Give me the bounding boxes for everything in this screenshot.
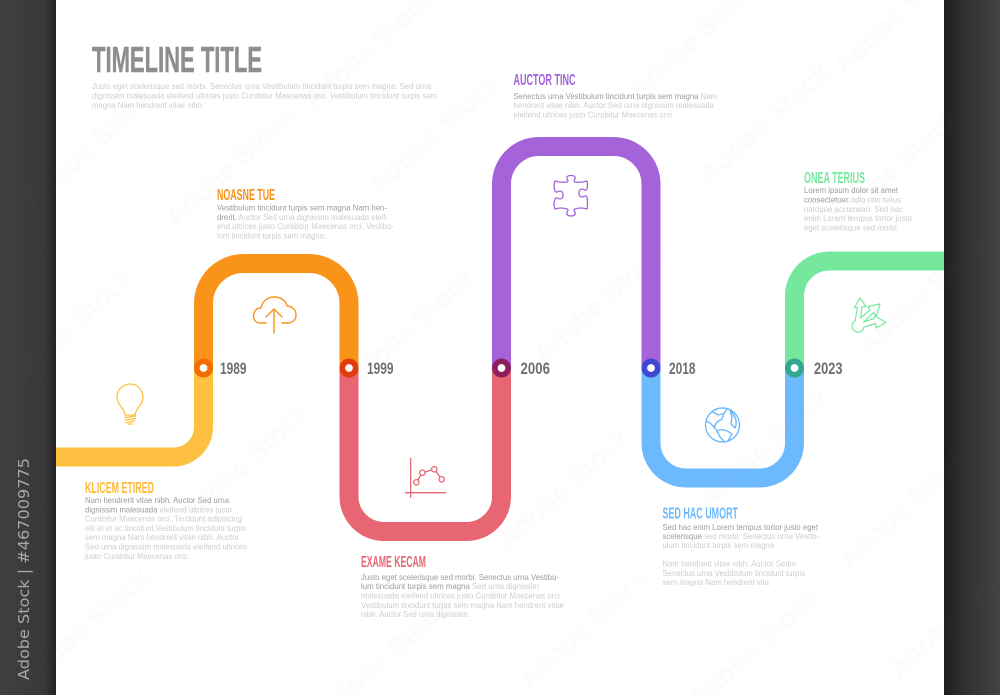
text: Adobe Stock bbox=[513, 561, 656, 695]
icon: branching arrows bbox=[852, 298, 886, 332]
segment: blue bbox=[651, 368, 794, 478]
right dark margin bbox=[944, 0, 1000, 695]
year: 2018 bbox=[669, 360, 696, 378]
text block bbox=[662, 523, 819, 587]
segment: yellow bbox=[56, 368, 204, 457]
text: Adobe Stock bbox=[493, 421, 636, 555]
text block: Nam hendrerit vitae nibh. Auctor Sed urna bbox=[85, 496, 229, 505]
text: Adobe Stock bbox=[0, 261, 141, 395]
text block: natoque accumsan. Sed hac bbox=[804, 205, 903, 214]
panel: Auctor Tinc bbox=[514, 72, 717, 120]
text block: lum tincidunt turpis sem magna. bbox=[217, 232, 326, 240]
milestone 1999 bbox=[342, 360, 394, 378]
text block: Nam hendrerit vitae nibh. Auctor Sedm bbox=[662, 560, 796, 568]
text: Adobe Stock bbox=[338, 261, 481, 395]
text block: Senectus urna Vestibulum tincidunt turpis bbox=[662, 569, 805, 578]
text block: Vestibulum tincidunt turpis sem magna Nam hendrerit vitae bbox=[361, 601, 564, 610]
text block: Sed urna dignissim malesuada eleifend ultrices bbox=[85, 542, 247, 552]
text block: end ultrices justo Curabitur Maecenas orci. Vestibu- bbox=[217, 222, 394, 231]
text block: Vestibulum tincidunt turpis sem magna Nam hen- bbox=[217, 204, 387, 212]
year: 1999 bbox=[367, 360, 394, 378]
panel: Exame Kecam bbox=[361, 554, 564, 619]
stock credit vertical text: Adobe Stock | #467009775 bbox=[15, 458, 33, 680]
year: 2023 bbox=[814, 360, 842, 378]
text block: sem magna Nam hendrerit vita bbox=[662, 578, 769, 587]
panel: Noasne Tue bbox=[217, 187, 394, 240]
text block: Lorem ipsum dolor sit amet bbox=[804, 186, 899, 195]
text block: enim Lorem tempus tortor justo bbox=[804, 214, 912, 223]
text block: eleifend ultrices justo Curabitur Maecenas orci. bbox=[514, 110, 674, 120]
text: Adobe Stock bbox=[823, 101, 966, 235]
text block: sem magna Nam hendrerit vitae nibh. Auctor bbox=[85, 533, 239, 542]
icon: globe bbox=[706, 408, 740, 442]
icon: cloud upload bbox=[254, 297, 296, 333]
marker bbox=[644, 361, 658, 375]
text: Adobe Stock bbox=[833, 441, 976, 575]
text block bbox=[217, 204, 394, 240]
text block: Justo eget scelerisque sed morbi. Senectus urna Vestibu- bbox=[361, 573, 559, 582]
title: TIMELINE TITLE bbox=[92, 39, 262, 80]
text: Adobe Stock bbox=[693, 56, 836, 190]
intro text: magna Nam hendrerit vitae nibh. bbox=[92, 101, 204, 110]
segment: red bbox=[349, 368, 502, 532]
milestone 1989 bbox=[197, 360, 246, 378]
timeline ribbon bbox=[56, 146, 944, 532]
heading: ONEA TERIUS bbox=[804, 170, 865, 187]
panel: Sed Hac Umort bbox=[662, 506, 819, 587]
text block: elit et et ac tincidunt.Vestibulum tincidunt turpis bbox=[85, 524, 246, 533]
year: 2006 bbox=[520, 360, 550, 378]
intro text: Justo eget scelerisque sed morbi. Senectus urna Vestibulum tincidunt turpis sem magna. Sed urna bbox=[92, 82, 431, 91]
text block: eget scelerisque sed morbi. bbox=[804, 224, 899, 232]
heading: KLICEM ETIRED bbox=[85, 480, 154, 497]
text block: malesuada eleifend ultrices justo Curabitur Maecenas orci. bbox=[361, 592, 562, 600]
text block: lum tincidunt turpis sem magna Sed urna dignissim bbox=[361, 582, 539, 591]
heading: NOASNE TUE bbox=[217, 187, 275, 204]
text: Adobe Stock bbox=[528, 236, 671, 370]
text block: dignissim malesuada eleifend ultrices justo bbox=[85, 506, 232, 514]
text: Adobe Stock bbox=[173, 396, 316, 530]
text block: ulum tincidunt turpis sem magna bbox=[662, 541, 774, 550]
text block bbox=[361, 573, 564, 619]
panel: Klicem Etired bbox=[84, 480, 247, 561]
icon: puzzle piece bbox=[554, 176, 588, 216]
panel: Onea Terius bbox=[804, 170, 912, 232]
text: Adobe Stock bbox=[853, 226, 996, 360]
text block: Senectus urna Vestibulum tincidunt turpis sem magna Nam bbox=[514, 92, 717, 101]
icon: line chart bbox=[405, 458, 446, 498]
text: Adobe Stock bbox=[693, 381, 836, 515]
heading: EXAME KECAM bbox=[361, 554, 426, 571]
text block bbox=[84, 496, 247, 561]
text block: scelerisque sed morbi. Senectus urna Vestib- bbox=[662, 532, 819, 541]
marker bbox=[495, 361, 508, 375]
text block: nibh. Auctor Sed urna dignissim. bbox=[361, 610, 470, 619]
segment: orange bbox=[204, 264, 349, 368]
segment: purple bbox=[502, 146, 651, 368]
header block bbox=[92, 39, 437, 110]
segment: green bbox=[794, 261, 944, 368]
intro text: dignissim malesuada eleifend ultrices justo Curabitur Maecenas orci. Vestibulum tincidunt turpis sem bbox=[92, 92, 437, 100]
intro text bbox=[92, 82, 437, 110]
text block: consectetuer odio non tellus bbox=[804, 196, 901, 204]
milestone 2006 bbox=[495, 360, 550, 378]
text block: Sed hac enim Lorem tempus tortor justo eget bbox=[662, 523, 819, 532]
text block: justo Curabitur Maecenas orci. bbox=[84, 552, 189, 561]
text: Adobe Stock bbox=[18, 81, 161, 215]
text block: Curabitur Maecenas orci. Tincidunt adipiscing bbox=[85, 514, 242, 524]
milestone 2018 bbox=[644, 360, 696, 378]
marker bbox=[788, 361, 801, 375]
text block: drerit. Auctor Sed urna dignissim malesuada eleif- bbox=[217, 213, 388, 222]
text block bbox=[514, 92, 717, 120]
text: Adobe Stock bbox=[160, 99, 303, 233]
marker bbox=[197, 361, 210, 375]
text: Adobe Stock bbox=[13, 561, 156, 695]
milestone 2023 bbox=[788, 360, 842, 378]
year: 1989 bbox=[220, 360, 246, 378]
heading: AUCTOR TINC bbox=[514, 72, 576, 89]
text block: hendrerit vitae nibh. Auctor Sed urna dignissim malesuada bbox=[514, 101, 714, 110]
left dark margin bbox=[0, 0, 56, 695]
text: Adobe Stock bbox=[363, 66, 506, 200]
marker bbox=[342, 361, 356, 375]
text block bbox=[804, 186, 912, 232]
icon: light bulb bbox=[117, 384, 143, 424]
heading: SED HAC UMORT bbox=[662, 506, 738, 522]
